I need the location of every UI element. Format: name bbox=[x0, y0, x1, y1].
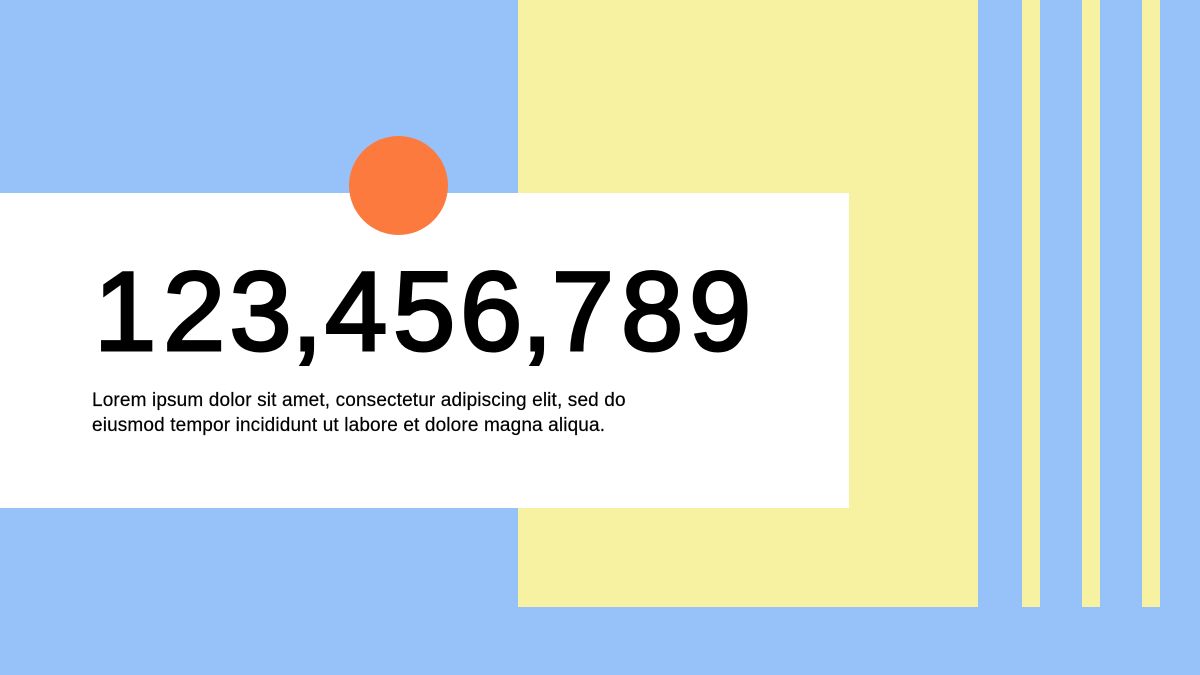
big number: 9 bbox=[689, 249, 751, 374]
panel: yellow block bbox=[518, 0, 978, 607]
stripe: yellow 1 bbox=[1022, 0, 1040, 607]
stripe: yellow 2 bbox=[1082, 0, 1100, 607]
panel: white card bbox=[0, 193, 849, 508]
body text bbox=[92, 390, 626, 436]
body text: Lorem ipsum dolor sit amet, consectetur adipiscing elit, sed do bbox=[92, 390, 626, 411]
big number: 2 bbox=[163, 249, 225, 374]
stripe: yellow 3 bbox=[1142, 0, 1160, 607]
big number: 8 bbox=[621, 249, 683, 374]
big number bbox=[94, 249, 751, 374]
big number: 5 bbox=[393, 249, 455, 374]
big number: , bbox=[522, 249, 553, 374]
big number: 4 bbox=[325, 249, 387, 374]
icon: orange circle bbox=[349, 136, 448, 235]
big number: 1 bbox=[94, 249, 156, 374]
big number: , bbox=[292, 249, 323, 374]
big number: 7 bbox=[552, 249, 614, 374]
body text: eiusmod tempor incididunt ut labore et dolore magna aliqua. bbox=[92, 415, 605, 436]
big number: 6 bbox=[460, 249, 522, 374]
big number: 3 bbox=[229, 249, 292, 374]
